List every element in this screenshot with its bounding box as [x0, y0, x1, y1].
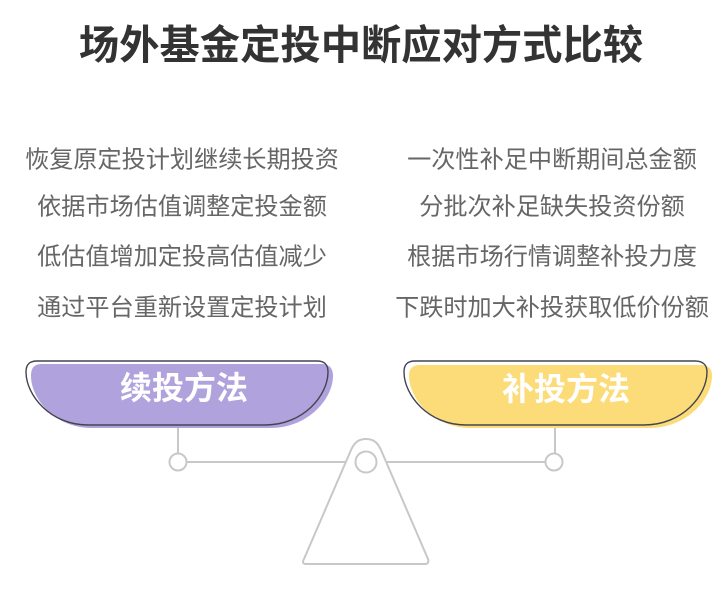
- title: 场外基金定投中断应对方式比较: [79, 23, 643, 68]
- text block: continued investment methods: [25, 146, 339, 322]
- text block: top-up investment methods: 一次性补足中断期间总金额: [407, 146, 697, 174]
- center pivot circle: [356, 452, 376, 472]
- triangular stand: [303, 439, 428, 564]
- text block: continued investment methods: 通过平台重新设置定投计划: [37, 294, 327, 322]
- text block: continued investment methods: 依据市场估值调整定投金额: [37, 194, 327, 220]
- left pivot circle: [170, 454, 186, 470]
- text block: top-up investment methods: 分批次补足缺失投资份额: [419, 194, 685, 220]
- text block: top-up investment methods: [395, 146, 709, 322]
- beam left: [187, 461, 345, 463]
- right hanger: [554, 427, 556, 454]
- text block: top-up investment methods: 根据市场行情调整补投力度: [407, 244, 697, 270]
- panel: 补投方法: [404, 361, 712, 428]
- text block: continued investment methods: 恢复原定投计划继续长期投资: [25, 146, 339, 174]
- beam right: [387, 461, 546, 463]
- text block: continued investment methods: 低估值增加定投高估值减少: [37, 244, 327, 270]
- balance scale: [170, 427, 562, 564]
- left hanger: [177, 427, 179, 454]
- text block: top-up investment methods: 下跌时加大补投获取低价份额: [395, 294, 709, 322]
- heading: 补投方法: [502, 371, 630, 407]
- heading: 续投方法: [120, 370, 248, 406]
- right pivot circle: [546, 454, 562, 470]
- panel: 续投方法: [26, 361, 333, 428]
